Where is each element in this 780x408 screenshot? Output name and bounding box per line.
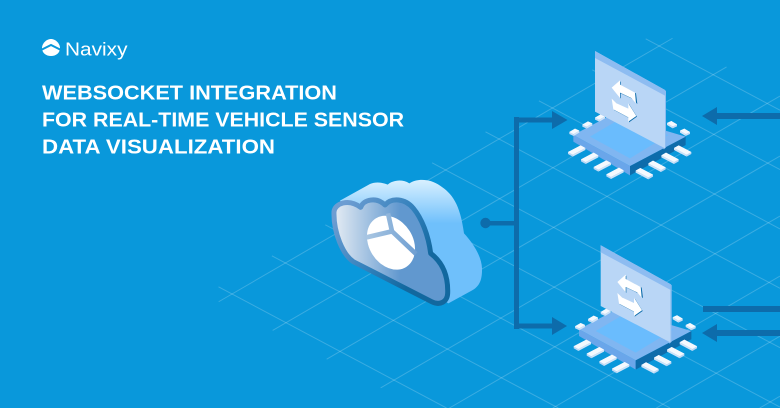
- cloud face: [334, 200, 448, 303]
- connector arrows from cloud to chips: [480, 111, 568, 335]
- title: DATA VISUALIZATION: [42, 136, 275, 158]
- title: WEBSOCKET INTEGRATION: [42, 82, 337, 104]
- icon: logo mark: [41, 39, 61, 56]
- logo: Navixy: [41, 38, 128, 60]
- logo text: Navixy: [65, 38, 128, 60]
- title: FOR REAL-TIME VEHICLE SENSOR: [42, 110, 405, 132]
- arrow into top chip: [702, 107, 780, 125]
- cloud with pie chart: [334, 180, 482, 303]
- isometric grid: [218, 38, 780, 408]
- pie chart: [357, 207, 425, 279]
- chip top: [568, 51, 691, 179]
- chip bottom: [574, 245, 697, 374]
- cloud depth: [340, 180, 482, 303]
- arrow into bottom chip: [702, 324, 780, 342]
- title: [42, 82, 405, 158]
- right arrows: [702, 107, 780, 342]
- outgoing bar: [703, 306, 780, 312]
